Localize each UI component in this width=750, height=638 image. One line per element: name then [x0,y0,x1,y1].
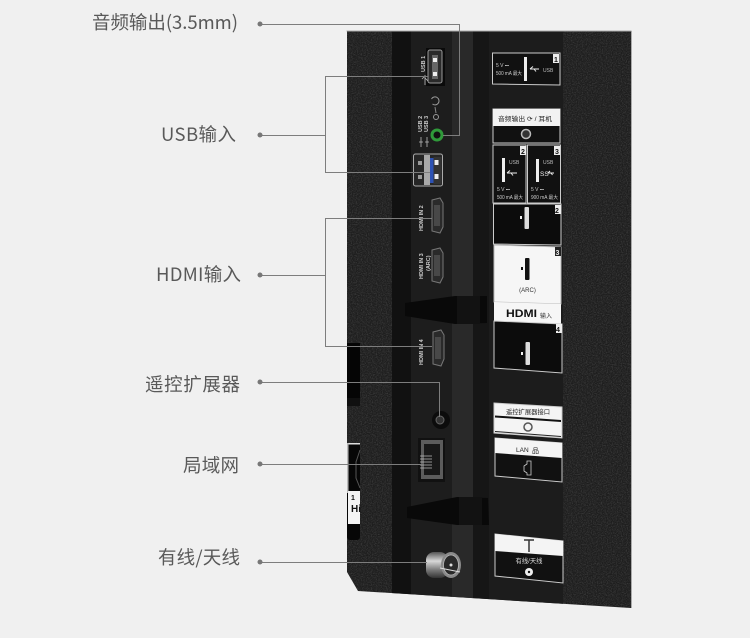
label: audio out: 音频输出(3.5mm) [92,9,238,35]
legend: USB 2 [493,145,526,203]
label: remote extender: 遥控扩展器 [145,371,240,397]
leader: antenna [258,560,427,564]
legend: USB 3 [528,145,560,203]
port: USB 1: USB 1 [421,56,427,72]
port: HDMI 3: (ARC) [426,255,432,271]
legend: USB 2: 2 [521,149,525,156]
legend: LAN: LAN [516,447,529,454]
legend: audio out: 音频输出 ⟳ / 耳机 [498,114,553,123]
legend: HDMI heading band: 输入 [540,312,552,320]
legend: HDMI 2: 2 [555,208,559,215]
legend: HDMI 4: 4 [556,327,560,334]
cable clip lower [407,497,489,525]
legend: remote extender port [494,403,562,438]
port: HDMI 3: HDMI IN 3 [419,253,425,279]
label: USB input: USB输入 [161,121,236,147]
legend: USB 3: 3 [555,149,559,156]
port: audio out: USB 2 [418,116,424,132]
leader: audio out [258,22,460,136]
label: HDMI input: HDMI输入 [156,261,241,287]
legend: HDMI heading band [494,302,561,324]
legend: USB 2: USB [509,160,520,166]
port: audio out [418,97,442,147]
ports column [414,48,461,578]
label: cable / antenna: 有线/天线 [158,544,240,570]
port: HDMI 4: HDMI IN 4 [419,338,425,365]
panel: TV rear [346,30,632,608]
port: HDMI 4 [419,330,444,366]
legend: USB 1 [492,53,560,85]
side connector recess: 1 [351,495,355,502]
legend: USB 3: 5 V ⎓ [531,187,544,193]
leader: LAN [258,462,424,466]
legend: USB 1: USB [543,68,554,74]
legend: USB 2: 5 V ⎓ [497,187,510,193]
legend: HDMI 2 [494,204,561,245]
port: remote extender [432,411,450,429]
legend: USB 3: SS [540,171,549,178]
legend: HDMI 3 [494,245,561,304]
cable clip upper [405,296,487,324]
legend: cable / antenna [495,534,563,583]
legend: USB 1: 5 V ⎓ [496,63,509,69]
legend: USB 1: 1 [554,57,558,64]
legend: USB 2: 500 mA 最大 [497,194,523,201]
legend: HDMI heading band: HDMI [506,308,537,320]
legend: HDMI 3: 3 [556,250,560,257]
legend: remote extender port: 遥控扩展器接口 [506,407,550,416]
port: audio out: USB 3 [424,116,430,132]
legend: LAN [495,438,562,482]
legend: HDMI 4 [494,321,562,373]
legend: audio out [493,109,560,143]
side connector recess [347,343,361,540]
port: antenna [426,552,461,578]
port: HDMI 3 [419,248,443,283]
legend: USB 3: USB [543,160,554,166]
leader: remote extender [258,380,440,417]
leader: HDMI input [258,218,432,346]
port: HDMI 2: HDMI IN 2 [419,205,425,231]
legend: LAN: 品 [532,447,539,455]
port: LAN [418,438,445,482]
legend: HDMI 3: (ARC) [519,288,536,294]
side connector recess: Hi [351,504,361,515]
port: HDMI 2 [419,198,443,233]
legend: cable / antenna: 有线/天线 [516,556,543,565]
port legend column [492,53,563,583]
legend: USB 3: 900 mA 最大 [531,194,558,201]
leader: USB input [258,76,430,172]
legend: USB 1: 500 mA 最大 [496,70,522,77]
port: USB 1 [421,48,445,86]
label: LAN: 局域网 [183,452,239,478]
port: USB 2 and 3 [414,154,442,186]
